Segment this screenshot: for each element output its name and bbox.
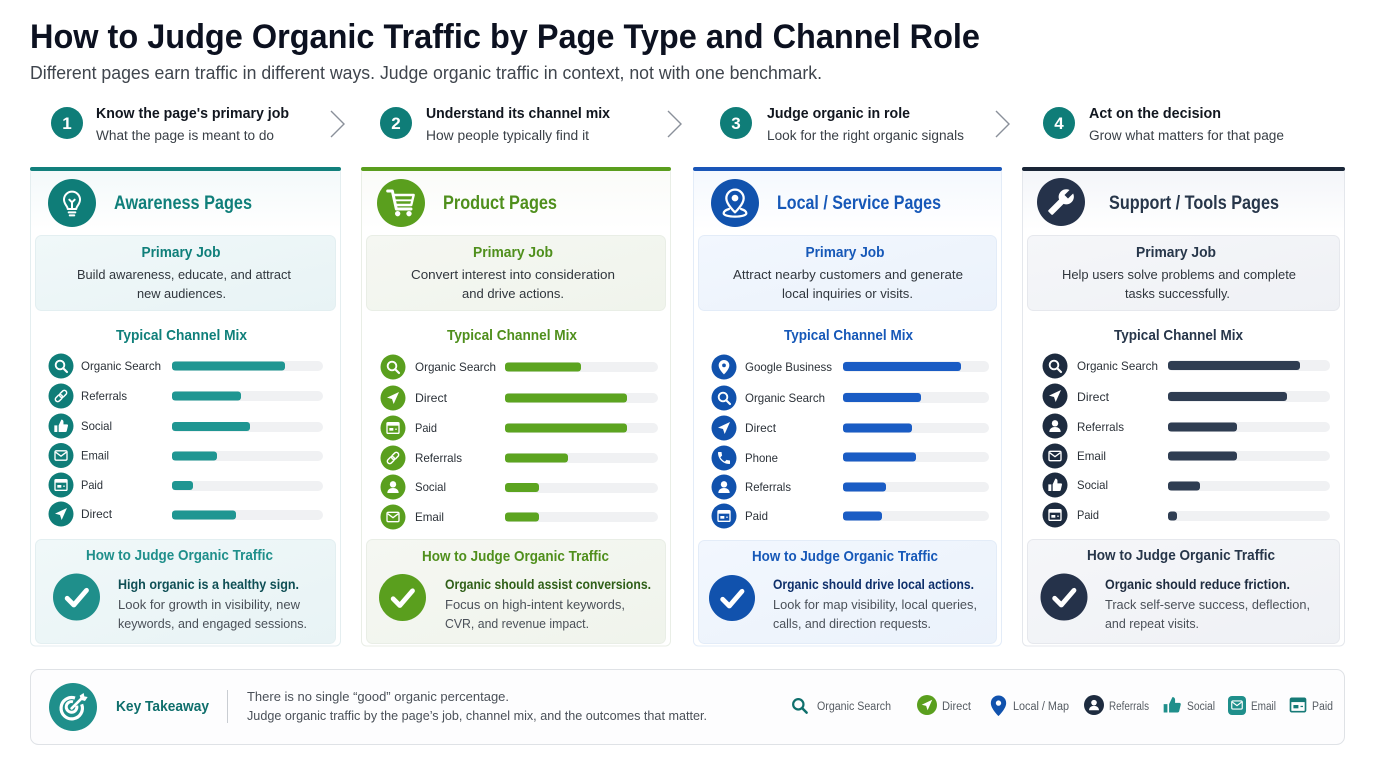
takeaway label: Key Takeaway <box>116 698 210 715</box>
legend: Direct <box>942 701 972 713</box>
how to judge box: CVR, and revenue impact. <box>445 616 589 631</box>
title: How to Judge Organic Traffic by Page Type and Channel Role <box>30 18 980 56</box>
channel mix bar chart: Google Business <box>745 360 832 374</box>
channel mix bar chart <box>48 354 323 526</box>
step 3 <box>720 105 964 143</box>
step 1 <box>51 105 289 143</box>
icon: shopping cart <box>377 179 425 227</box>
icon: light bulb <box>48 179 96 227</box>
how to judge box: How to Judge Organic Traffic <box>86 547 273 564</box>
step 1: What the page is meant to do <box>96 128 274 143</box>
how to judge box: How to Judge Organic Traffic <box>752 548 938 565</box>
step 2: Understand its channel mix <box>426 105 611 122</box>
arrow 1 <box>331 111 344 137</box>
channel mix bar chart: Organic Search <box>415 360 496 374</box>
how to judge box: calls, and direction requests. <box>773 616 931 631</box>
channel mix bar chart: Social <box>415 480 446 494</box>
channel mix bar chart: Organic Search <box>81 359 161 373</box>
primary job box: Build awareness, educate, and attract <box>77 267 291 282</box>
step 2: 2 <box>391 114 401 133</box>
channel mix bar chart: Organic Search <box>1077 359 1158 373</box>
arrow 3 <box>996 111 1009 137</box>
step 2 <box>380 105 611 143</box>
primary job box: Primary Job <box>1136 244 1216 261</box>
channel mix heading: Typical Channel Mix <box>116 327 248 344</box>
channel mix bar chart: Paid <box>1077 508 1099 522</box>
how to judge box: Organic should drive local actions. <box>773 577 974 592</box>
primary job box: and drive actions. <box>462 286 564 301</box>
how to judge box: Organic should reduce friction. <box>1105 577 1290 592</box>
step 4: 4 <box>1054 114 1064 133</box>
channel mix bar chart <box>380 354 658 530</box>
channel mix bar chart: Social <box>1077 478 1108 492</box>
panel: awareness pages <box>30 167 341 646</box>
how to judge box <box>698 540 996 644</box>
how to judge box: Track self-serve success, deflection, <box>1105 597 1310 612</box>
step 1: 1 <box>62 114 72 133</box>
channel mix bar chart: Referrals <box>81 389 127 403</box>
how to judge box <box>1028 540 1340 644</box>
primary job box: Primary Job <box>473 244 553 261</box>
takeaway text: There is no single “good” organic percentage. <box>247 689 509 704</box>
primary job box: Help users solve problems and complete <box>1062 267 1296 282</box>
how to judge box <box>36 540 336 644</box>
primary job box: Attract nearby customers and generate <box>733 267 963 282</box>
channel mix bar chart: Email <box>81 448 109 462</box>
channel mix heading: Typical Channel Mix <box>784 327 914 344</box>
channel mix bar chart: Direct <box>415 391 448 405</box>
primary job box <box>366 236 666 310</box>
arrow 2 <box>668 111 681 137</box>
channel mix bar chart <box>712 354 989 528</box>
channel mix bar chart: Paid <box>81 478 103 492</box>
channel mix bar chart: Direct <box>1077 390 1110 404</box>
legend: Referrals <box>1109 701 1149 713</box>
how to judge box: and repeat visits. <box>1105 616 1199 631</box>
how to judge box: How to Judge Organic Traffic <box>422 548 609 565</box>
panel: local / service pages <box>693 167 1002 646</box>
legend: Email <box>1251 701 1276 713</box>
channel mix heading: Typical Channel Mix <box>1114 327 1244 344</box>
icon: map pin <box>711 179 759 227</box>
takeaway text <box>247 689 707 723</box>
step 4: Grow what matters for that page <box>1089 128 1284 143</box>
how to judge box: Focus on high-intent keywords, <box>445 597 625 612</box>
channel mix bar chart: Direct <box>81 507 113 521</box>
icon: wrench <box>1037 178 1085 226</box>
channel mix bar chart: Social <box>81 419 112 433</box>
channel mix bar chart: Email <box>1077 449 1106 463</box>
step 4 <box>1043 105 1284 143</box>
key takeaway bar <box>30 670 1344 744</box>
legend: Local / Map <box>1013 701 1069 713</box>
channel mix bar chart: Referrals <box>1077 420 1124 434</box>
channel mix bar chart: Referrals <box>415 451 462 465</box>
takeaway text: Judge organic traffic by the page’s job, channel mix, and the outcomes that matter. <box>247 708 707 723</box>
channel mix bar chart: Paid <box>745 509 768 523</box>
card heading: Local / Service Pages <box>777 193 941 214</box>
step 2: How people typically find it <box>426 128 589 143</box>
step 1: Know the page's primary job <box>96 105 289 122</box>
primary job box <box>36 236 336 310</box>
primary job box: local inquiries or visits. <box>782 286 913 301</box>
step 3: 3 <box>731 114 741 133</box>
how to judge box: keywords, and engaged sessions. <box>118 616 307 631</box>
panel: product pages <box>361 167 671 646</box>
how to judge box <box>366 540 666 644</box>
card heading: Support / Tools Pages <box>1109 193 1279 214</box>
legend: Organic Search <box>817 701 891 713</box>
step 4: Act on the decision <box>1089 105 1221 122</box>
channel mix bar chart: Phone <box>745 451 778 465</box>
primary job box <box>698 236 996 310</box>
channel mix bar chart: Referrals <box>745 480 791 494</box>
primary job box: new audiences. <box>137 286 226 301</box>
how to judge box: High organic is a healthy sign. <box>118 577 299 592</box>
channel mix bar chart: Paid <box>415 421 437 435</box>
channel mix bar chart: Organic Search <box>745 391 825 405</box>
subtitle: Different pages earn traffic in different ways. Judge organic traffic in context, not with one benchmark. <box>30 63 822 83</box>
card heading: Product Pages <box>443 193 557 214</box>
legend <box>793 695 1333 716</box>
how to judge box: Look for growth in visibility, new <box>118 597 301 612</box>
channel mix bar chart: Email <box>415 510 444 524</box>
how to judge box: Look for map visibility, local queries, <box>773 597 977 612</box>
panel: support / tools pages <box>1022 167 1345 646</box>
card heading: Awareness Pages <box>114 193 252 214</box>
legend: Social <box>1187 701 1215 713</box>
channel mix heading: Typical Channel Mix <box>447 327 578 344</box>
how to judge box: How to Judge Organic Traffic <box>1087 547 1275 564</box>
how to judge box: Organic should assist conversions. <box>445 577 651 592</box>
step 3: Judge organic in role <box>767 105 910 122</box>
step 3: Look for the right organic signals <box>767 128 964 143</box>
primary job box: tasks successfully. <box>1125 286 1230 301</box>
primary job box: Convert interest into consideration <box>411 267 615 282</box>
icon: target <box>49 683 97 731</box>
primary job box <box>1028 236 1340 310</box>
primary job box: Primary Job <box>806 244 884 261</box>
channel mix bar chart <box>1042 354 1330 528</box>
channel mix bar chart: Direct <box>745 421 777 435</box>
primary job box: Primary Job <box>142 244 220 261</box>
legend: Paid <box>1312 701 1333 713</box>
